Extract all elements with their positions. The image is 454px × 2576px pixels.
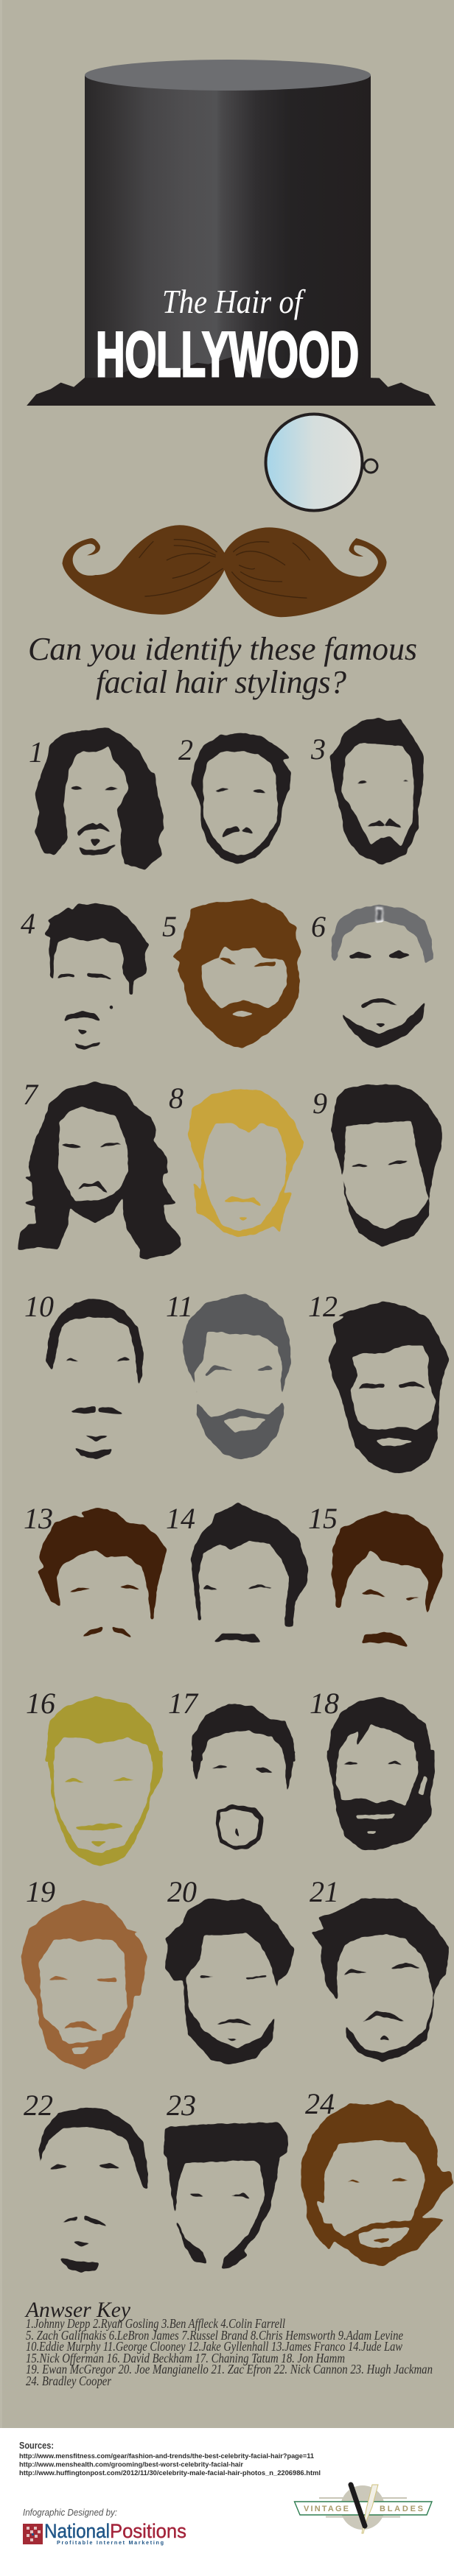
- silhouette 16 lower: [46, 1751, 163, 1866]
- silhouette 22 upper: [39, 2107, 147, 2189]
- silhouette 4: [45, 903, 149, 1050]
- face 3: [310, 718, 423, 865]
- face 16: [26, 1687, 163, 1866]
- face 21: [310, 1875, 449, 2061]
- logo mark: [23, 2524, 43, 2544]
- answer key names: 24. Bradley Cooper: [26, 2374, 112, 2388]
- answer key names: [26, 2316, 433, 2388]
- hat body: [85, 75, 371, 384]
- face 13: [24, 1502, 167, 1639]
- number 24: 24: [305, 2087, 335, 2120]
- face 19: [21, 1875, 147, 2069]
- designer credit: Infographic Designed by:: [23, 2507, 117, 2518]
- number 20: 20: [167, 1875, 197, 1908]
- number 17: 17: [168, 1687, 199, 1720]
- silhouette 3: [330, 718, 423, 865]
- number 16: 16: [26, 1687, 55, 1720]
- silhouette 7: [18, 1082, 181, 1260]
- face 17: [168, 1687, 296, 1850]
- number 11: 11: [166, 1290, 193, 1323]
- silhouette 15: [332, 1511, 443, 1648]
- face 22: [24, 2089, 147, 2273]
- face 7: [18, 1078, 181, 1260]
- number 10: 10: [24, 1290, 54, 1323]
- source links: http://www.menshealth.com/grooming/best-worst-celebrity-facial-hair: [19, 2460, 243, 2469]
- number 2: 2: [178, 733, 193, 766]
- icon: monocle: [265, 414, 377, 511]
- silhouette 22 lower: [57, 2216, 108, 2273]
- silhouette 11: [183, 1294, 291, 1460]
- number 15: 15: [308, 1502, 338, 1535]
- answer key heading: Anwser Key: [24, 2298, 131, 2322]
- footer panel: [0, 2428, 454, 2576]
- answer key names: 1.Johnny Depp 2.Ryan Gosling 3.Ben Affleck 4.Colin Farrell: [26, 2316, 285, 2331]
- heading question: Can you identify these famous: [28, 631, 417, 667]
- number 13: 13: [24, 1502, 53, 1535]
- face 20: [165, 1875, 294, 2064]
- face 11: [166, 1290, 291, 1460]
- top hat with skyline brim: [27, 60, 436, 406]
- number 9: 9: [312, 1087, 327, 1120]
- silhouette 18 lower: [327, 1751, 434, 1850]
- icon: handlebar moustache: [62, 525, 387, 617]
- logo: Vintage Blades: BLADES: [380, 2505, 423, 2513]
- answer key: [24, 2298, 433, 2388]
- face 18: [310, 1687, 434, 1850]
- face 24: [301, 2087, 453, 2267]
- face 12: [308, 1290, 450, 1473]
- number 12: 12: [308, 1290, 338, 1323]
- heading question: facial hair stylings?: [96, 664, 346, 700]
- silhouette 21: [311, 1899, 449, 2061]
- silhouette 20: [165, 1899, 294, 2064]
- silhouette 18 upper: [327, 1697, 434, 1762]
- heading question: [28, 631, 417, 700]
- silhouette 13: [38, 1508, 167, 1639]
- face 23: [164, 2089, 288, 2268]
- silhouette 17 upper: [191, 1704, 296, 1762]
- number 8: 8: [169, 1081, 184, 1115]
- source links: http://www.mensfitness.com/gear/fashion-and-trends/the-best-celebrity-facial-hair?page=11: [19, 2452, 315, 2460]
- silhouette 1: [35, 728, 164, 869]
- silhouette 24: [301, 2100, 453, 2267]
- number 14: 14: [166, 1502, 195, 1535]
- silhouette 14: [191, 1503, 308, 1643]
- face 8: [169, 1081, 304, 1237]
- number 3: 3: [310, 733, 326, 766]
- silhouette 9: [332, 1085, 441, 1247]
- number 23: 23: [167, 2089, 196, 2122]
- face 10: [24, 1290, 143, 1459]
- source links: http://www.huffingtonpost.com/2012/11/30/celebrity-male-facial-hair-photos_n_2206986.html: [19, 2469, 321, 2477]
- silhouette 12: [329, 1301, 450, 1473]
- logo words: VINTAGE: [304, 2505, 349, 2513]
- number 21: 21: [310, 1875, 339, 1908]
- silhouette 23: [164, 2122, 288, 2268]
- tagline: Profitable Internet Marketing: [57, 2539, 164, 2546]
- source links: [19, 2452, 321, 2477]
- wordmark: National: [44, 2520, 110, 2542]
- silhouette 17 lower: [191, 1751, 296, 1850]
- razor handle: [351, 2485, 365, 2526]
- skyline brim: [27, 357, 436, 406]
- razor blade: [362, 2485, 378, 2533]
- number 6: 6: [311, 910, 326, 943]
- silhouette 19: [21, 1900, 147, 2069]
- face 4: [21, 903, 149, 1050]
- face 15: [308, 1502, 443, 1648]
- number 4: 4: [21, 907, 35, 940]
- title line: The Hair of: The Hair of: [162, 283, 306, 320]
- number 18: 18: [310, 1687, 339, 1720]
- silhouette 6: [332, 905, 433, 1048]
- face 14: [166, 1502, 308, 1643]
- logo: National Positions: Positions: [110, 2520, 186, 2542]
- silhouette 16 upper: [46, 1696, 163, 1762]
- number 22: 22: [24, 2089, 53, 2122]
- face 1: [29, 728, 164, 869]
- number 7: 7: [23, 1078, 39, 1111]
- hat top ellipse: [85, 60, 371, 91]
- face 6: [311, 905, 433, 1048]
- silhouette 2: [191, 733, 291, 864]
- number 5: 5: [162, 910, 177, 943]
- silhouette 8: [188, 1089, 304, 1237]
- face 9: [312, 1085, 441, 1247]
- sources heading: Sources:: [19, 2441, 54, 2451]
- sources: [19, 2441, 321, 2477]
- answer key names: 15.Nick Offerman 16. David Beckham 17. Chaning Tatum 18. Jon Hamm: [26, 2351, 345, 2365]
- face 5: [162, 899, 301, 1048]
- face 2: [178, 733, 291, 864]
- silhouette 10: [46, 1299, 143, 1459]
- number 1: 1: [29, 735, 43, 769]
- logo: National Positions: [23, 2520, 186, 2546]
- logo: Vintage Blades: [295, 2485, 432, 2533]
- silhouette 5: [172, 899, 301, 1048]
- number 19: 19: [26, 1875, 55, 1908]
